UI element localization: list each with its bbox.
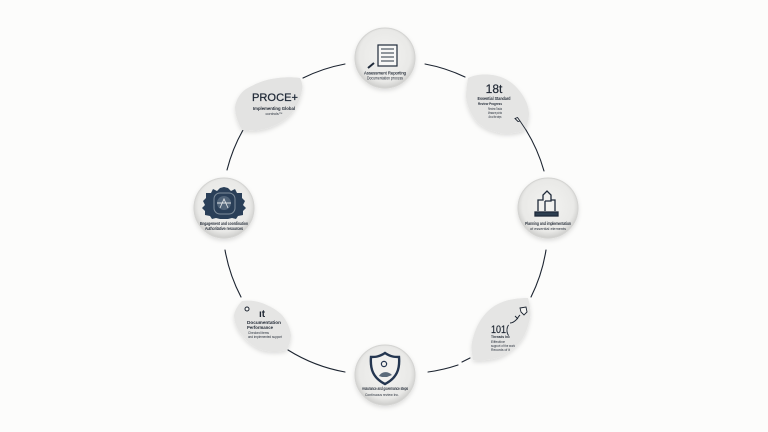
icon: connector knot <box>510 307 527 323</box>
leaf body text: Effective <box>491 340 505 344</box>
leaf: top right <box>466 74 529 133</box>
node: top document <box>355 28 415 88</box>
caption <box>200 221 248 231</box>
leaf body text: Documentation <box>247 320 281 325</box>
leaf connector <box>245 307 249 311</box>
node: right building <box>518 178 578 238</box>
leaf: bottom left <box>234 301 291 352</box>
icon: shield <box>371 353 399 384</box>
icon: document with pen <box>368 45 397 68</box>
cycle ring arcs <box>225 64 546 372</box>
leaf: top left <box>235 77 302 131</box>
leaf body text: Review Progress <box>478 102 502 106</box>
leaf body text: Review Tasks <box>488 107 502 111</box>
caption: Continuous review Inc. <box>365 392 399 397</box>
icon: building on plinth <box>535 191 558 216</box>
leaf heading: 101( <box>491 324 509 336</box>
leaf body text <box>491 334 515 352</box>
leaf body text: Threads Inc <box>491 334 511 339</box>
node: bottom shield <box>355 345 415 405</box>
caption <box>364 70 407 80</box>
leaf body text <box>478 96 511 119</box>
leaf body text: controls™ <box>266 112 283 116</box>
leaf heading: 18t <box>486 82 503 96</box>
caption <box>525 221 572 231</box>
leaf body text: Measure points <box>488 111 502 115</box>
leaf body text: and implemented support <box>248 335 282 339</box>
leaf body text: Implementing Global <box>253 106 295 111</box>
leaf body text: Performance <box>247 325 274 330</box>
caption: Assurance and governance steps <box>362 386 408 391</box>
caption: Documentation process <box>367 76 403 80</box>
leaf body text <box>253 106 295 116</box>
caption: of essential elements <box>530 226 566 231</box>
leaf heading: PROCE+ <box>252 92 298 104</box>
leaf heading: ıt <box>259 309 266 320</box>
caption: Planning and implementation <box>525 221 572 226</box>
leaf body text: Checked items <box>248 331 269 335</box>
icon: gear <box>202 187 246 219</box>
leaf connector <box>515 118 526 130</box>
node: left gear <box>194 178 254 238</box>
leaf body text <box>247 320 282 339</box>
caption: Engagement and coordination <box>200 221 248 226</box>
leaf body text: Essential Standard <box>478 96 511 101</box>
leaf body text: Records of it <box>491 348 510 352</box>
leaf body text: support of the work <box>491 344 515 348</box>
caption: Authoritative resources <box>205 226 243 231</box>
caption: Assessment Reporting <box>364 70 407 76</box>
leaf body text: About the steps <box>488 115 502 119</box>
caption <box>362 386 408 397</box>
leaf: bottom right <box>472 298 530 360</box>
